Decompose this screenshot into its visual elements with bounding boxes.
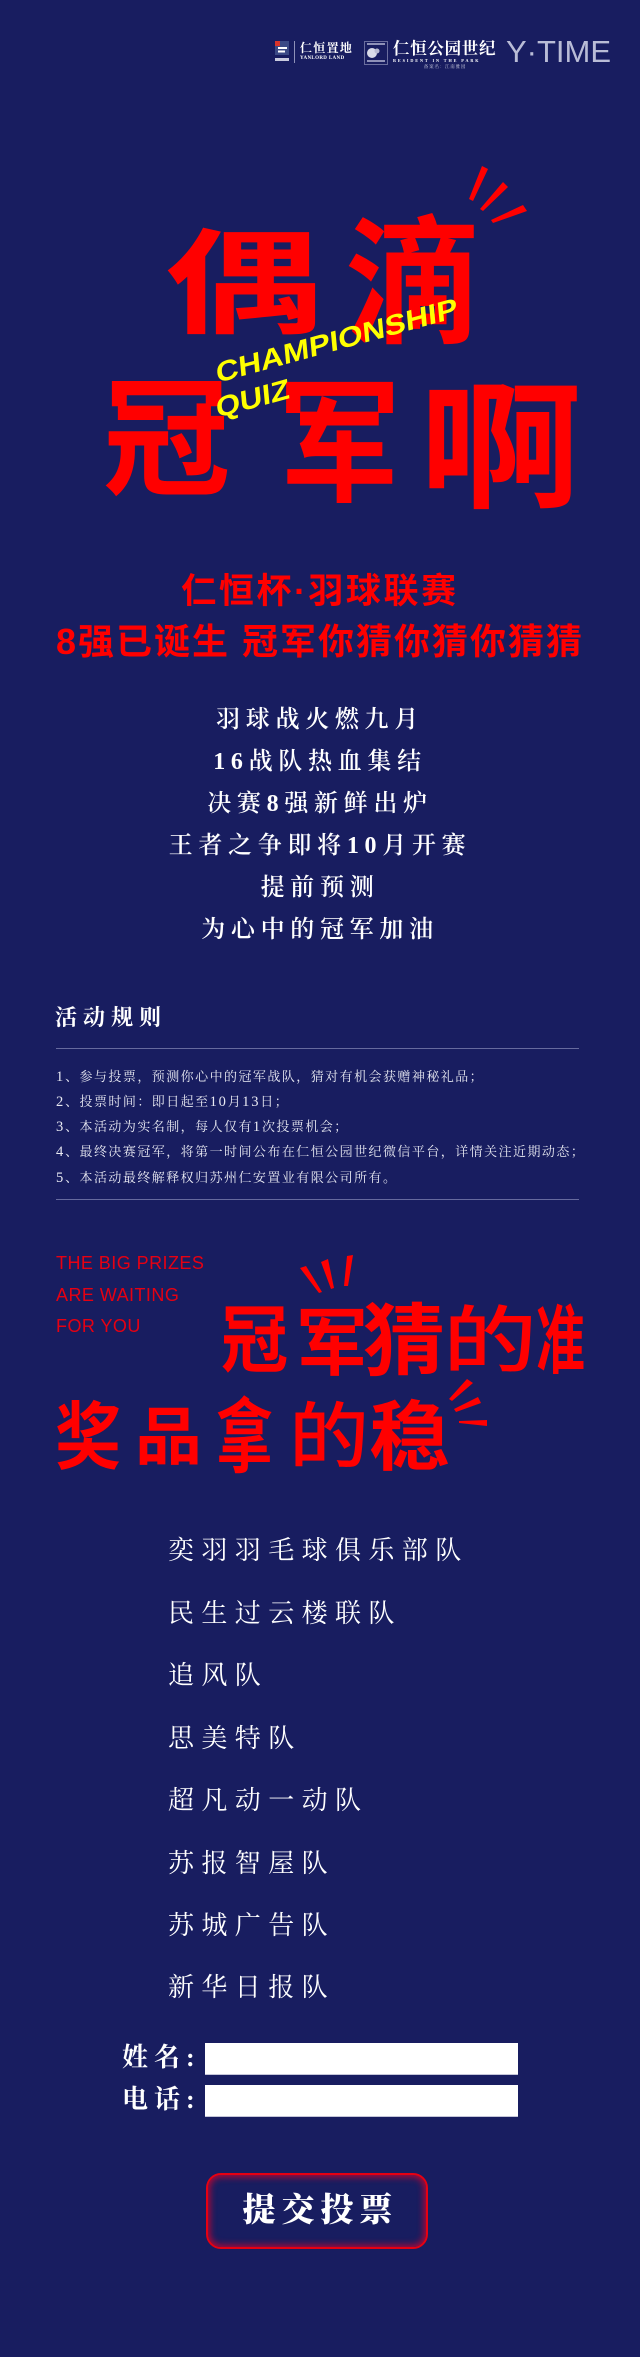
art line: 冠军猜的准: 的	[443, 1282, 537, 1388]
intro text: 为心中的冠军加油	[201, 917, 439, 943]
emphasis rays top	[300, 1255, 353, 1293]
title word: 偶滴	[165, 171, 482, 372]
logo text: Yanlord Land: 仁恒置地	[300, 41, 353, 55]
emphasis rays	[469, 166, 527, 223]
rules list: 2、投票时间：即日起至10月13日；	[56, 1094, 289, 1110]
form: phone	[122, 2085, 518, 2117]
art line: 奖品拿的稳: 拿	[216, 1373, 273, 1490]
intro text: 羽球战火燃九月	[216, 707, 424, 733]
art line: 奖品拿的稳: 品	[135, 1386, 202, 1477]
rules heading: 活动规则	[55, 1005, 167, 1030]
team list: 追风队	[168, 1661, 268, 1690]
submit button: 提交投票	[242, 2193, 398, 2229]
art line: 冠军猜的准	[221, 1279, 585, 1393]
logo text: Yanlord Land	[294, 41, 360, 63]
prizes english caption	[56, 1253, 204, 1336]
team list	[168, 1536, 469, 2002]
logo: Yanlord square	[275, 41, 289, 61]
form: name: 姓名:	[122, 2043, 201, 2072]
title word: 冠军啊: 军	[278, 337, 401, 530]
heading line 2: 8强已诞生 冠军你猜你猜你猜猜	[56, 621, 584, 662]
red heading	[56, 572, 584, 662]
rules list: 5、本活动最终解释权归苏州仁安置业有限公司所有。	[56, 1170, 397, 1186]
intro text: 提前预测	[261, 875, 379, 901]
yellow caption: CHAMPIONSHIP QUIZ: CHAMPIONSHIP	[215, 291, 459, 389]
intro text: 16战队热血集结	[213, 749, 427, 775]
art line: 冠军猜的准: 猜	[363, 1279, 445, 1393]
title word: 冠军啊: 冠	[103, 336, 230, 522]
title word: 偶滴: 偶	[165, 192, 323, 357]
logo text: Residence in the Park: 仁恒公园世纪	[393, 39, 496, 58]
art line: 奖品拿的稳: 奖	[55, 1379, 121, 1485]
art line: 冠军猜的准: 准	[536, 1282, 585, 1389]
intro text: 决赛8强新鲜出炉	[207, 791, 433, 817]
team list: 新华日报队	[168, 1973, 335, 2002]
title word: 偶滴: 滴	[345, 171, 482, 372]
art line: 奖品拿的稳	[55, 1373, 450, 1490]
art line: 冠军猜的准: 冠	[221, 1281, 288, 1388]
team list: 奕羽羽毛球俱乐部队	[168, 1536, 469, 1565]
yellow caption: CHAMPIONSHIP QUIZ: QUIZ	[215, 372, 291, 424]
team list: 思美特队	[168, 1724, 302, 1753]
emphasis rays side	[449, 1379, 487, 1426]
rules list	[56, 1069, 585, 1186]
intro text: 王者之争即将10月开赛	[169, 833, 471, 859]
art line: 冠军猜的准: 军	[296, 1284, 368, 1391]
submit button	[206, 2173, 428, 2249]
prizes english caption: ARE WAITING	[56, 1285, 179, 1305]
team list: 超凡动一动队	[168, 1786, 368, 1815]
art line: 奖品拿的稳: 的	[289, 1379, 369, 1483]
rules list: 4、最终决赛冠军，将第一时间公布在仁恒公园世纪微信平台，详情关注近期动态；	[56, 1144, 585, 1160]
hero title art	[103, 166, 582, 530]
team list: 苏报智屋队	[168, 1849, 335, 1878]
form: name	[122, 2043, 518, 2075]
logo text: Residence in the Park: 备案名：江南雅园	[424, 64, 466, 69]
header logos	[275, 34, 611, 69]
art line: 奖品拿的稳: 稳	[369, 1376, 450, 1486]
logo text: Y·TIME: Y·TIME	[506, 34, 611, 69]
title word: 冠军啊	[103, 336, 582, 537]
form: phone: 电话:	[122, 2085, 201, 2114]
yellow caption: CHAMPIONSHIP QUIZ	[215, 291, 459, 424]
heading line 1: 仁恒杯·羽球联赛	[181, 572, 459, 611]
logo text: Residence in the Park	[393, 39, 496, 69]
logo text: Yanlord Land: YANLORD LAND	[300, 56, 344, 61]
rules list: 3、本活动为实名制，每人仅有1次投票机会；	[56, 1119, 349, 1135]
prizes title art	[55, 1255, 585, 1490]
prizes english caption: FOR YOU	[56, 1316, 141, 1336]
rules list: 1、参与投票，预测你心中的冠军战队，猜对有机会获赠神秘礼品；	[56, 1069, 484, 1085]
intro text	[169, 706, 471, 943]
prizes english caption: THE BIG PRIZES	[56, 1253, 204, 1273]
team list: 苏城广告队	[168, 1911, 335, 1940]
logo text: Residence in the Park: RESIDENT IN THE PARK	[393, 58, 480, 63]
logo: Residence square	[364, 41, 388, 65]
team list: 民生过云楼联队	[168, 1599, 402, 1628]
